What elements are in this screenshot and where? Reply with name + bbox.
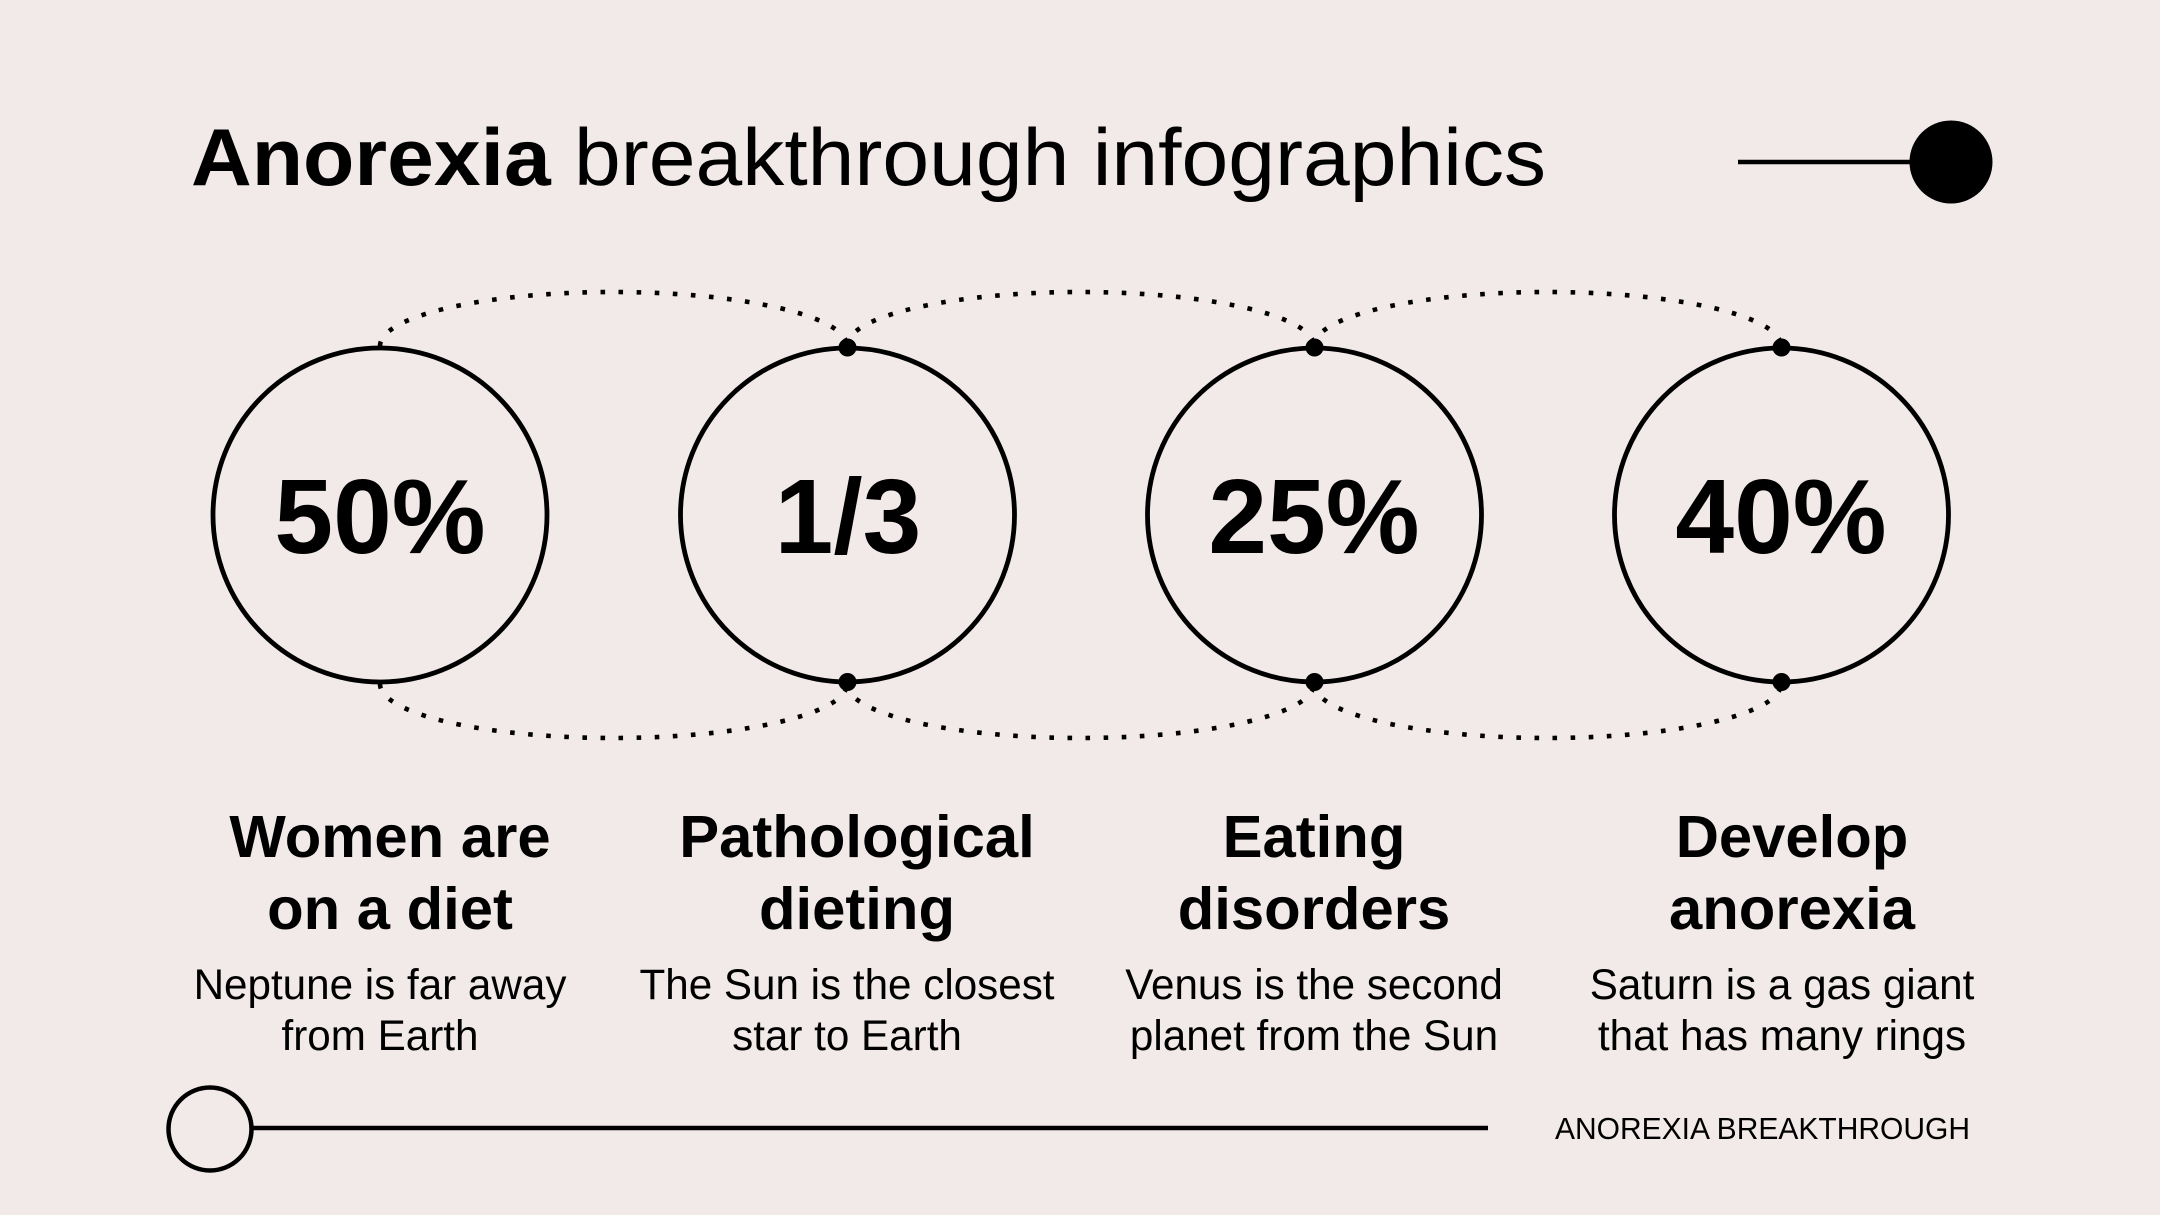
heading: women are on a diet: Women are xyxy=(229,803,551,870)
description: Neptune: Neptune is far away xyxy=(194,961,567,1008)
heading: pathological dieting: Pathological xyxy=(679,803,1035,870)
circle stat: 25% xyxy=(1148,338,1482,691)
heading: develop anorexia: Develop xyxy=(1676,803,1908,870)
description: Sun: The Sun is the closest xyxy=(639,961,1055,1008)
description: Venus xyxy=(1125,961,1503,1059)
circle stat: 40%: 40% xyxy=(1675,458,1887,576)
description: Saturn: Saturn is a gas giant xyxy=(1590,961,1975,1008)
panel: eating disorders xyxy=(1125,338,1503,1059)
circle stat: 50% xyxy=(213,348,547,682)
description: Sun: star to Earth xyxy=(732,1012,962,1059)
description: Neptune xyxy=(194,961,567,1059)
description: Sun xyxy=(639,961,1055,1059)
description: Saturn xyxy=(1590,961,1975,1059)
heading: pathological dieting: dieting xyxy=(759,875,955,942)
description: Saturn: that has many rings xyxy=(1598,1012,1966,1059)
heading: develop anorexia: anorexia xyxy=(1669,875,1916,942)
circle stat: 1/3: 1/3 xyxy=(775,458,921,576)
heading: eating disorders xyxy=(1178,803,1450,942)
icon: footer line with hollow circle xyxy=(168,1088,1488,1170)
heading: women are on a diet: on a diet xyxy=(267,875,513,942)
heading: pathological dieting xyxy=(679,803,1035,942)
panel: develop anorexia xyxy=(1590,338,1975,1059)
heading: eating disorders: Eating xyxy=(1223,803,1405,870)
dotted connectors between circles xyxy=(380,292,1781,738)
circle stat: 40% xyxy=(1614,338,1948,691)
panel: pathological dieting xyxy=(639,338,1055,1059)
circle stat: 1/3 xyxy=(680,338,1014,691)
description: Venus: Venus is the second xyxy=(1125,961,1503,1008)
circle stat: 25%: 25% xyxy=(1208,458,1420,576)
circle stat: 50%: 50% xyxy=(274,458,486,576)
description: Neptune: from Earth xyxy=(282,1012,478,1059)
panel: women on a diet xyxy=(194,348,567,1059)
footer label: ANOREXIA BREAKTHROUGH xyxy=(1555,1111,1970,1146)
description: Venus: planet from the Sun xyxy=(1130,1012,1498,1059)
heading: develop anorexia xyxy=(1669,803,1916,942)
heading: eating disorders: disorders xyxy=(1178,875,1450,942)
title: Anorexia breakthrough infographics xyxy=(191,113,1546,203)
heading: women are on a diet xyxy=(229,803,551,942)
icon: header line with solid circle xyxy=(1738,120,1992,204)
